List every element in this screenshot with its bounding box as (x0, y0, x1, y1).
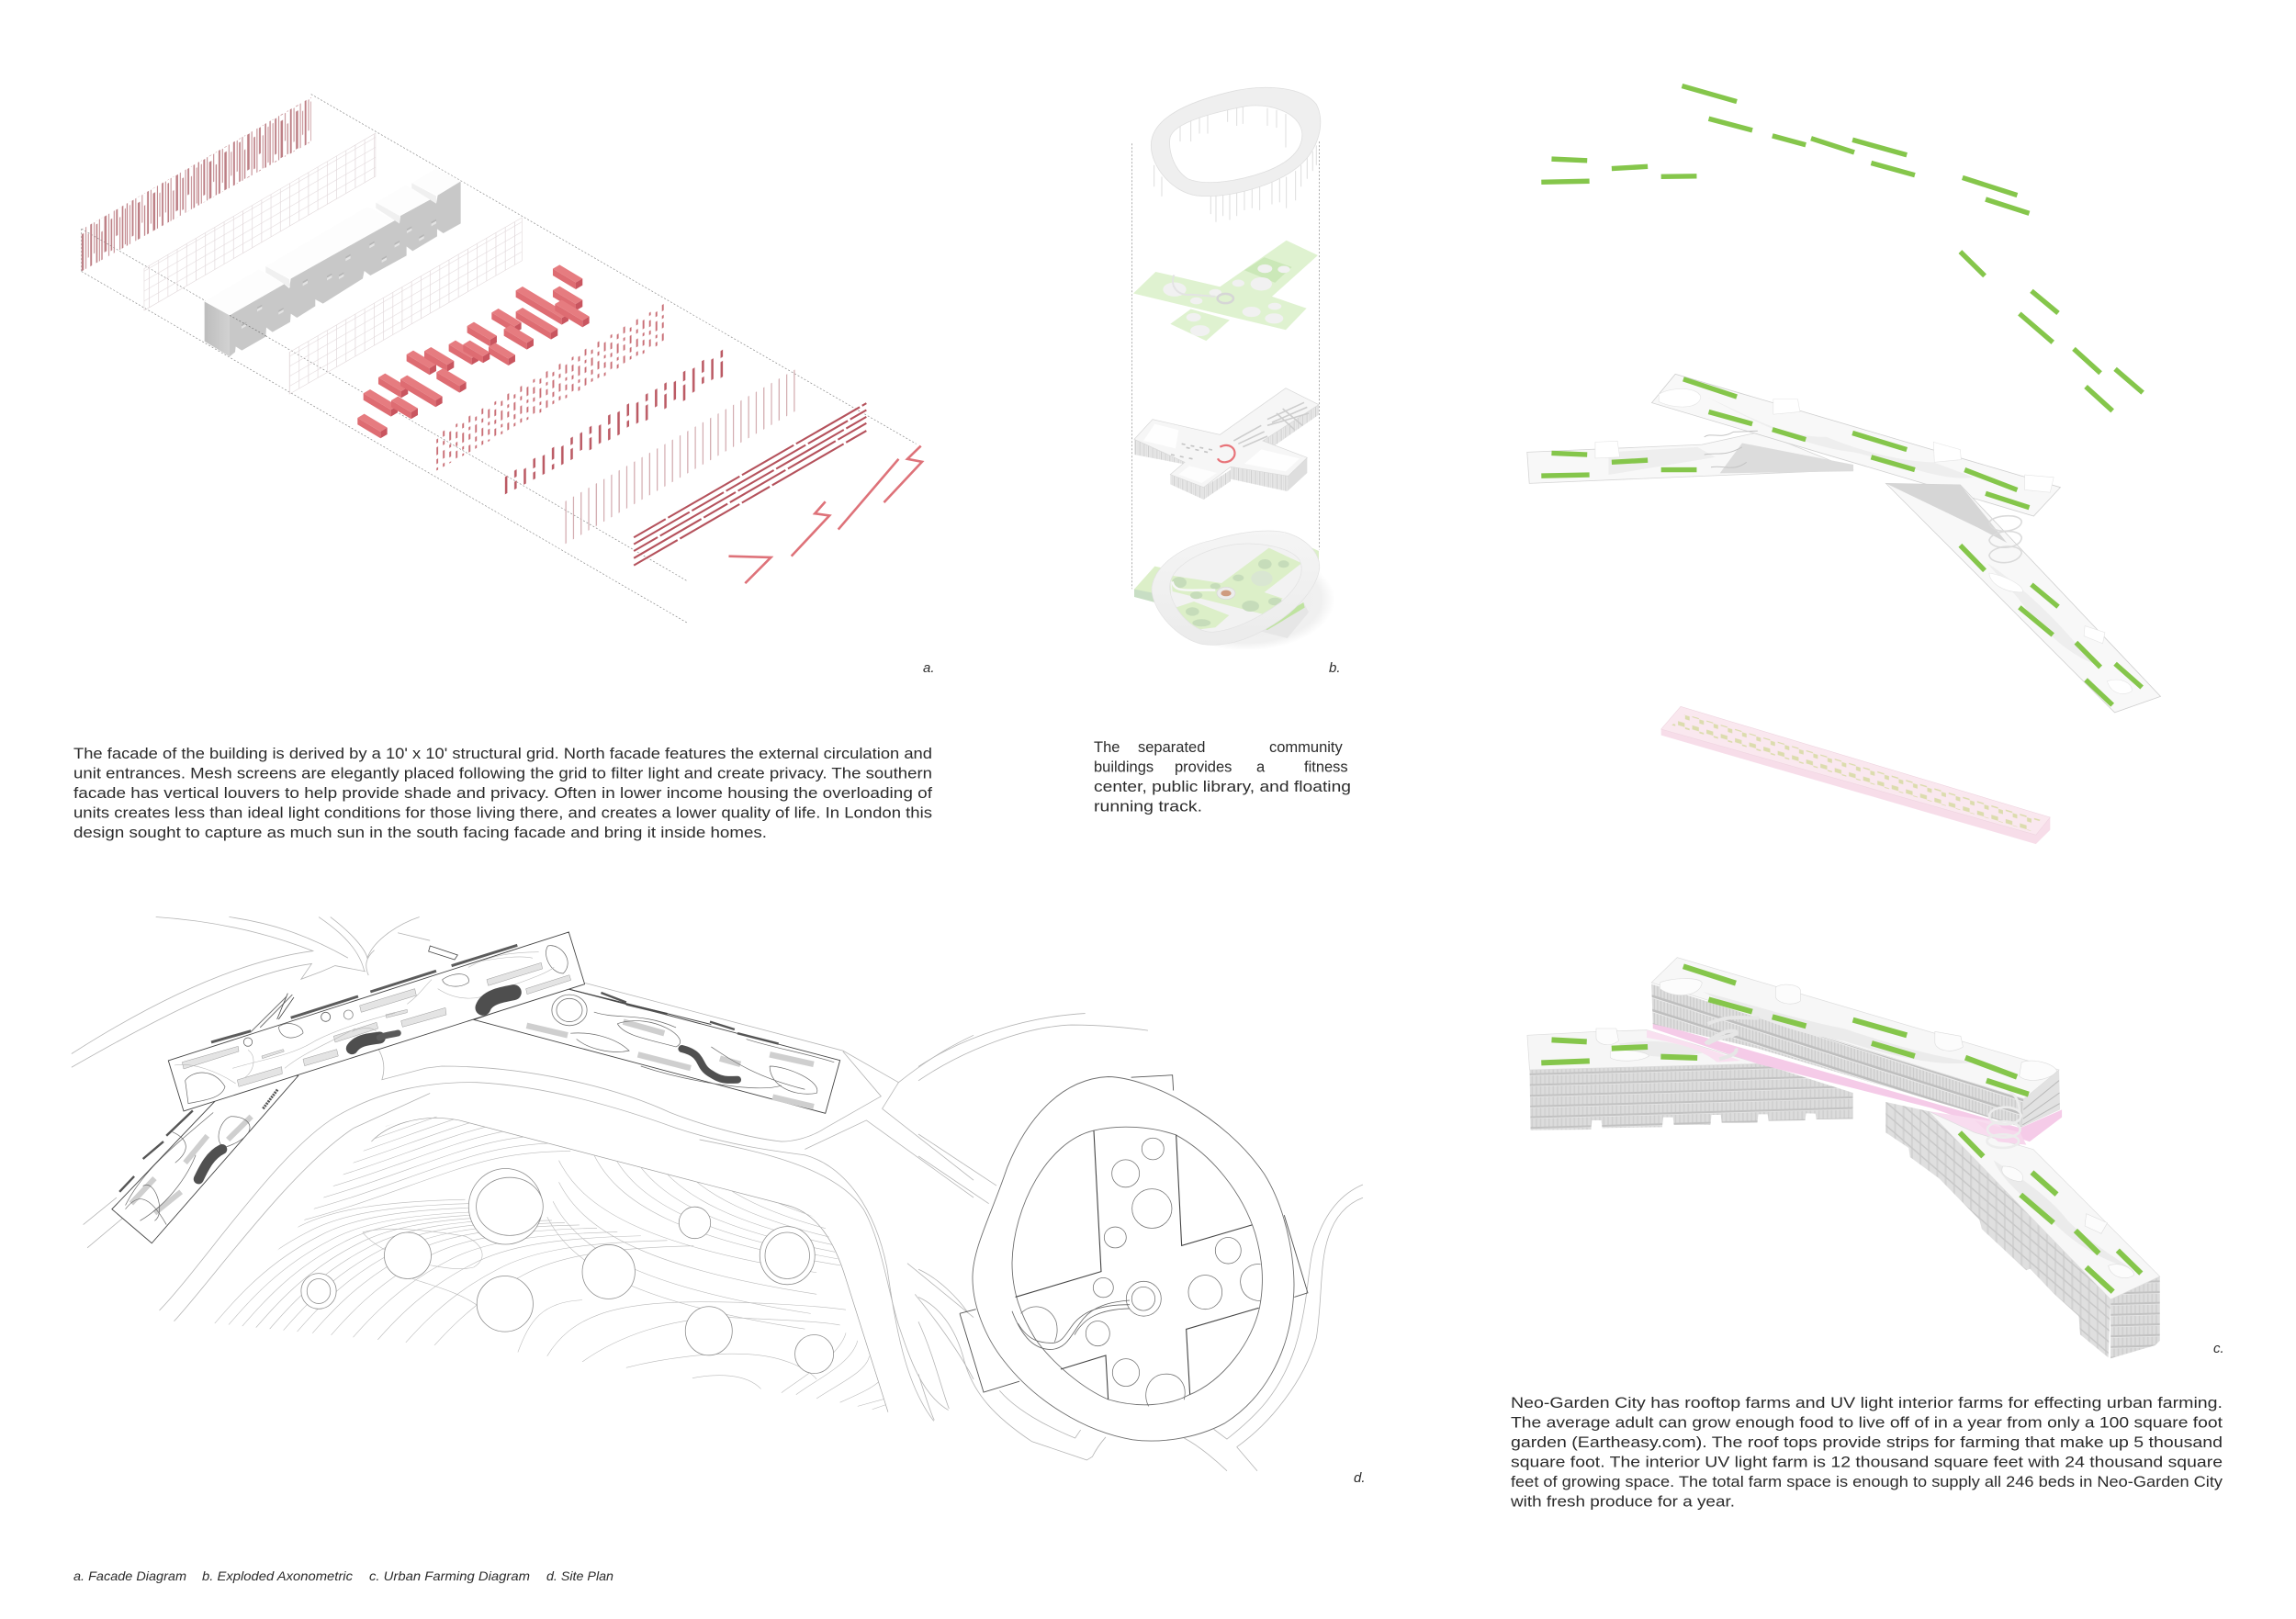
red fin panels (504, 346, 727, 495)
rooftop slab layer (1527, 374, 2161, 713)
left wing facade (1530, 1062, 1853, 1130)
park circular plantings (301, 1169, 834, 1374)
panel c description text: garden (Eartheasy.com). The roof tops provide strips for farming that make up 5 thousand (1511, 1433, 2223, 1451)
site roads (72, 917, 974, 1421)
circulation outline (277, 946, 457, 1019)
panel b description text: community (1269, 739, 1344, 756)
pink UV farm band (1653, 1022, 2062, 1141)
label c: c. (2213, 1341, 2224, 1356)
right building wing plan (474, 988, 840, 1113)
left wing roof (1527, 1030, 1760, 1070)
hanging columns (1154, 102, 1316, 222)
cross-shaped building outline (1016, 1130, 1259, 1400)
panel c: assembled urban farming building (1527, 958, 2160, 1358)
label b: b. (1329, 660, 1341, 676)
red balcony volumes (357, 264, 590, 438)
label d: d. (1354, 1470, 1366, 1486)
mesh screen north (144, 133, 376, 310)
panel c description text: Neo-Garden City has rooftop farms and UV light interior farms for effecting urban farming. (1511, 1394, 2223, 1411)
panel a: facade diagram (82, 95, 922, 624)
panel c description text: The average adult can grow enough food to live off of in a year from only a 100 square foot (1511, 1414, 2223, 1431)
main wing end face (2021, 1070, 2060, 1127)
panel b description text: fitness (1304, 759, 1348, 775)
interior contours and courts (186, 946, 568, 1104)
panel a description text: The facade of the building is derived by a 10' x 10' structural grid. North facade features the external circulation and (73, 746, 932, 762)
north louver screen (82, 97, 311, 272)
lower-left building wing plan (112, 995, 298, 1243)
panel b description text: center, public library, and floating (1094, 779, 1351, 795)
panel b description text (1094, 739, 1351, 815)
main wing facade (1651, 984, 2059, 1127)
panel a description text: design sought to capture as much sun in the south facing facade and bring it inside homes. (73, 825, 767, 841)
north side circulation bars (211, 945, 517, 1042)
assembled ground shadow (1157, 549, 1334, 650)
main wing roof (1651, 958, 2059, 1099)
perforated panels (436, 302, 664, 471)
third wing roof (1929, 1111, 2160, 1299)
panel b description text: buildings (1094, 759, 1154, 775)
panel b description text: separated (1138, 739, 1205, 756)
park contour lines (215, 1117, 885, 1410)
main wing floor lines at end (2022, 1081, 2060, 1125)
exploded layers, upper and lower louvers and mesh (82, 95, 922, 624)
figure captions: b. Exploded Axonometric (202, 1568, 353, 1583)
horizontal balcony rails (634, 403, 866, 566)
track ring outlines (973, 1076, 1294, 1441)
panel c: rooftop farming strips layer (1527, 86, 2161, 844)
third wing facade (1885, 1102, 2110, 1357)
courtyard circles (1021, 1138, 1261, 1406)
ring, roof plate and guides (1132, 87, 1321, 589)
panel a description text: facade has vertical louvers to help provide shade and privacy. Often in lower income housing the overloading of (73, 785, 932, 802)
green roof plate (1133, 241, 1318, 341)
panel a description text: unit entrances. Mesh screens are elegantly placed following the grid to filter light and create privacy. The southern (73, 766, 932, 782)
assembled community building (1134, 531, 1320, 645)
pink glow over left wing roof (1647, 1030, 1740, 1062)
building massing and balcony volumes (205, 168, 590, 438)
figure captions: d. Site Plan (546, 1568, 613, 1583)
mesh screen south (289, 218, 522, 394)
figure captions: a. Facade Diagram (73, 1568, 186, 1583)
roof paths and pavilions (1596, 979, 2134, 1278)
figure captions (73, 1568, 613, 1583)
pink band overlap near spiral (1975, 1120, 2026, 1145)
panel c description text: square foot. The interior UV light farm is 12 thousand square feet with 24 thousand square (1511, 1453, 2223, 1471)
hatched farm strips (182, 962, 571, 1086)
spiral ramp (1012, 1300, 1130, 1350)
floor plate walls and interior (1134, 388, 1319, 500)
panel b description text: The (1094, 739, 1120, 756)
pink glow at junction (1929, 1111, 2020, 1151)
panel b description text: a (1256, 759, 1266, 775)
panel a description text (73, 746, 932, 841)
panel c description text: with fresh produce for a year. (1510, 1493, 1735, 1510)
library floor plate and assembled building (1134, 388, 1334, 650)
panel d: site plan, community building (918, 1014, 1363, 1471)
south vertical louvers (565, 368, 797, 545)
central building wing plan (168, 932, 585, 1111)
panel a description text: units creates less than ideal light conditions for those living there, and creates a lower quality of life. In London this (73, 804, 932, 821)
panel d: site plan, left portion (72, 917, 1010, 1421)
park block edge (371, 1118, 888, 1412)
panel b: exploded axonometric (1132, 87, 1334, 650)
red stair pieces (728, 446, 922, 583)
panel c description text (1510, 1394, 2223, 1510)
construction dashed guide lines (82, 95, 917, 624)
interior UV light farm slab (1661, 706, 2050, 844)
panel c description text: feet of growing space. The total farm space is enough to supply all 246 beds in Neo-Garden City (1511, 1473, 2223, 1490)
rooftop farm strips (1541, 966, 2141, 1292)
panel b description text: provides (1175, 759, 1232, 775)
circulation blobs (352, 1038, 379, 1049)
panel b description text: running track. (1094, 799, 1202, 815)
building massing (205, 168, 461, 356)
figure captions: c. Urban Farming Diagram (369, 1568, 530, 1583)
label a: a. (923, 660, 935, 676)
dashed vertical guides (1132, 141, 1320, 589)
building footprints outside ring (960, 1075, 1308, 1392)
surrounding roads (918, 1014, 1363, 1471)
floating running track ring (1151, 87, 1321, 197)
guide line crossing building (230, 315, 266, 336)
third wing end face (2110, 1276, 2160, 1358)
